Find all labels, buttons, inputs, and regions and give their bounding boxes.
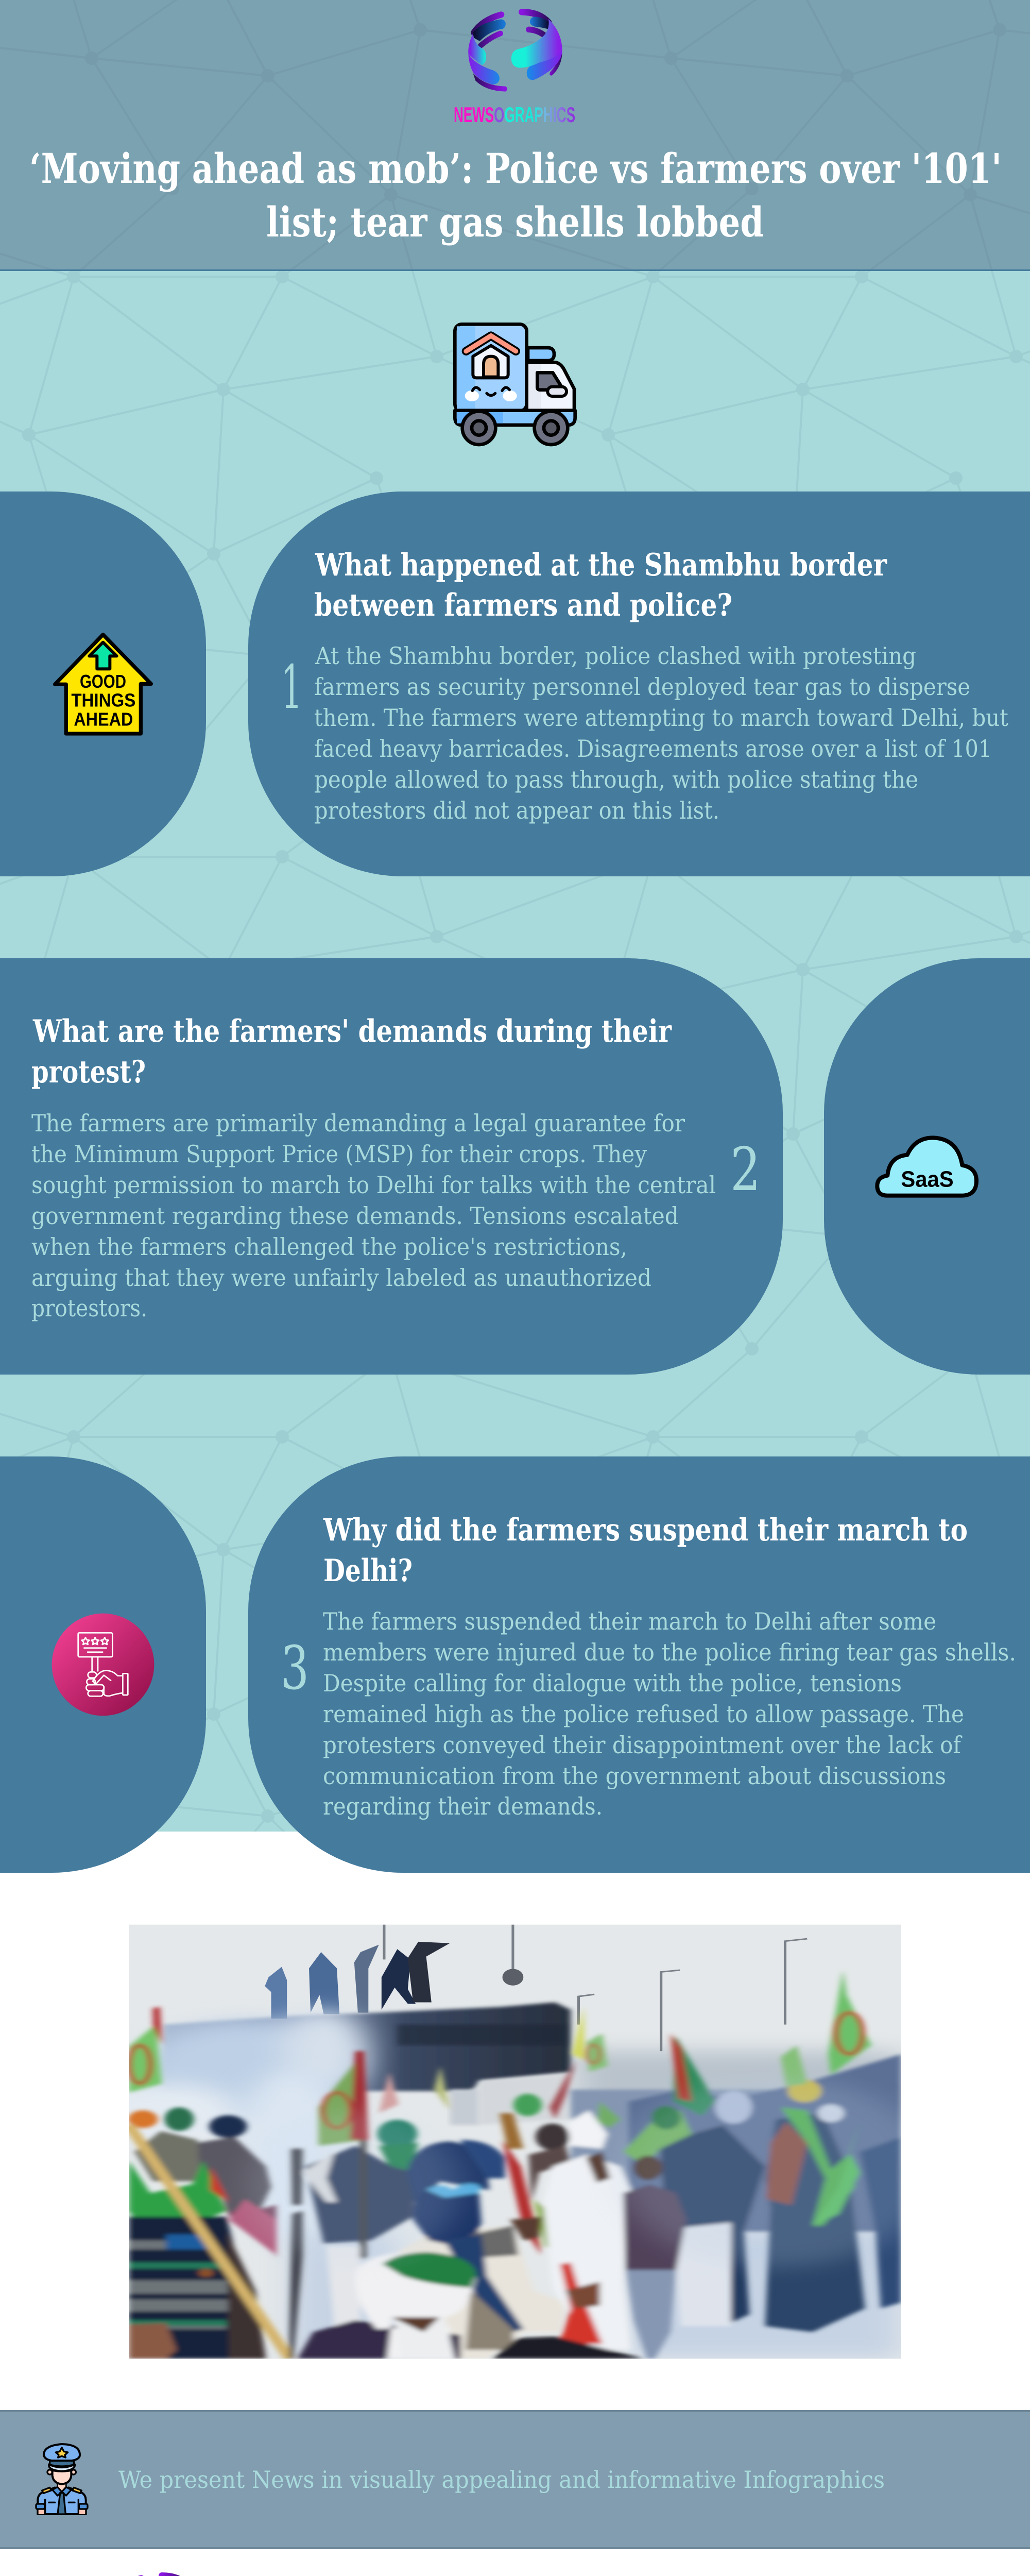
body text 2: the Minimum Support Price (MSP) for their crops. They [31,1140,647,1168]
body text 3: remained high as the police refused to allow passage. The [323,1700,964,1728]
panel 1: icon tab [0,492,206,876]
ground smoke [292,2231,901,2359]
smoke cloud left [140,2022,360,2122]
body text 1 [314,642,1008,824]
icon: moving truck with house [455,324,575,445]
figures on the bridge [265,1942,450,2019]
body text 1: At the Shambhu border, police clashed with protesting [315,642,916,670]
body text 2: sought permission to march to Delhi for talks with the central [31,1171,716,1199]
body text 3: regarding their demands. [323,1792,603,1820]
body text 3 [323,1607,1016,1820]
green and white turban man front [298,2320,460,2359]
background: teal network pattern [0,271,1030,1832]
panel 3: question and answer [248,1456,1030,1873]
title [29,144,1002,246]
distant trees and haze band at right [576,2051,901,2116]
right green sash man [813,2122,860,2226]
bridge [163,2003,571,2091]
haze over crowd [618,2078,933,2267]
green turban man [377,2120,417,2148]
body text 3: The farmers suspended their march to Delhi after some [323,1607,936,1635]
footer band [0,2410,1030,2549]
body text 1: people allowed to pass through, with police stating the [314,766,918,793]
heading 1 [314,547,887,623]
icon: good things ahead sign: GOOD [80,671,126,692]
panel 2: question and answer [0,958,783,1375]
girl in purple [623,2184,686,2270]
megaphone [503,1969,523,1986]
icon: police officer [36,2444,88,2514]
photo: farmers in tear gas at the border [103,1925,933,2359]
panel 3: icon tab [0,1456,206,1873]
heading 1: between farmers and police? [314,587,732,623]
icon: SaaS cloud [877,1138,976,1196]
header logo wordmark: NEWSOGRAPHICS [454,103,575,127]
icon: hand holding review sign [52,1614,154,1716]
footer tagline: We present News in visually appealing and informative Infographics [118,2466,885,2494]
red cloth in hand [559,2263,602,2344]
header logo [468,12,562,92]
heading 1: What happened at the Shambhu border [315,547,887,583]
footer logo [108,2575,202,2576]
crowd [128,1970,901,2359]
body text 3: protesters conveyed their disappointment over the lack of [323,1731,963,1759]
header panel [0,0,1030,271]
left crowd [128,2110,158,2128]
lamp posts [384,1925,807,2051]
heading 3 [323,1512,968,1589]
navy turban man center [397,2226,565,2359]
body text 3: communication from the government about discussions [323,1762,946,1790]
body text 2: when the farmers challenged the police's restrictions, [31,1233,627,1261]
icon: good things ahead sign: AHEAD [74,708,133,730]
body text 1: protestors did not appear on this list. [314,796,719,824]
icon: good things ahead sign: THINGS [71,690,135,711]
body text 2: protestors. [31,1294,147,1322]
title: list; tear gas shells lobbed [266,198,764,246]
panel 1: question and answer [248,492,1030,876]
icon: good things ahead sign [55,635,151,734]
body text 2 [31,1109,716,1322]
red umbrella [503,2140,542,2255]
white clad man [536,2124,569,2150]
panel 2: icon tab [824,958,1030,1375]
number 1: 1 [281,653,302,722]
flags [129,2025,162,2093]
heading 2: protest? [31,1054,146,1090]
number 3: 3 [281,1634,309,1703]
body text 1: farmers as security personnel deployed tear gas to disperse [314,673,970,701]
body text 2: The farmers are primarily demanding a legal guarantee for [31,1109,685,1137]
number 2: 2 [730,1135,761,1205]
heading 2: What are the farmers' demands during their [32,1013,672,1049]
body text 2: government regarding these demands. Tensions escalated [31,1202,679,1230]
body text 3: Despite calling for dialogue with the police, tensions [323,1669,902,1697]
heading 3: Delhi? [323,1553,413,1589]
bamboo pole [129,2125,289,2359]
body text 2: arguing that they were unfairly labeled as unauthorized [31,1264,651,1292]
icon: SaaS cloud: SaaS [901,1166,954,1192]
heading 2 [31,1013,672,1090]
